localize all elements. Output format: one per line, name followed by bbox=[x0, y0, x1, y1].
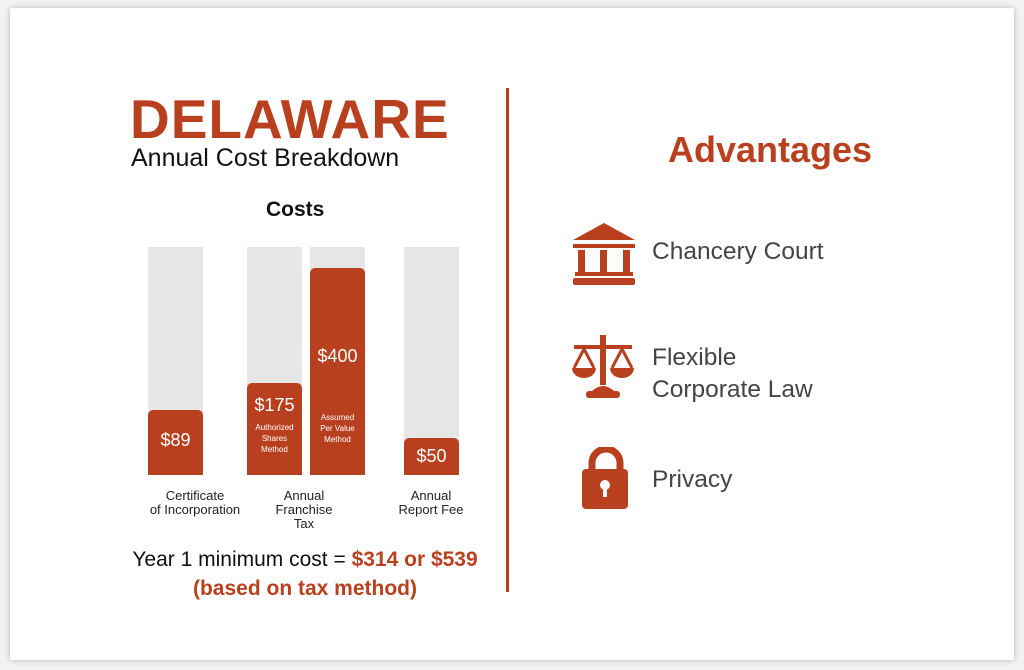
bar: assumed par value: $400 bbox=[317, 346, 358, 366]
text: flexible corporate law: Corporate Law bbox=[652, 376, 813, 403]
bar chart bbox=[148, 247, 464, 531]
bar chart: Franchise bbox=[275, 502, 333, 517]
bar labels: of Incorporation bbox=[150, 502, 240, 517]
bar: authorized shares: Authorized bbox=[255, 423, 294, 432]
bar: certificate: $89 bbox=[160, 430, 191, 450]
bar: assumed par value: Assumed bbox=[321, 413, 354, 422]
total cost text: Year 1 minimum cost = $314 or $539 bbox=[132, 548, 478, 571]
text: chancery court: Chancery Court bbox=[652, 238, 824, 265]
bar labels: Certificate bbox=[166, 488, 224, 503]
bar: annual report bbox=[404, 247, 459, 475]
bar: annual report: $50 bbox=[416, 446, 447, 466]
bar labels bbox=[150, 488, 240, 517]
icon: lock bbox=[582, 447, 628, 509]
bar chart: Report Fee bbox=[398, 502, 464, 517]
text: flexible corporate law bbox=[652, 344, 813, 403]
bar chart: Tax bbox=[294, 516, 314, 531]
icon: scales bbox=[572, 335, 634, 398]
total cost text: (based on tax method) bbox=[193, 577, 417, 600]
advantages heading: Advantages bbox=[668, 129, 872, 170]
bar: authorized shares: Shares bbox=[262, 434, 287, 443]
bar chart: Annual bbox=[284, 488, 324, 503]
bar: assumed par value: Per Value bbox=[320, 424, 355, 433]
subtitle: Annual Cost Breakdown bbox=[131, 144, 399, 172]
text: flexible corporate law: Flexible bbox=[652, 344, 736, 371]
bar: assumed par value: Method bbox=[324, 435, 351, 444]
total cost text bbox=[132, 548, 478, 600]
divider bbox=[506, 88, 509, 592]
title: DELAWARE bbox=[130, 88, 450, 150]
costs heading: Costs bbox=[266, 198, 324, 221]
text: privacy: Privacy bbox=[652, 466, 732, 493]
bar: assumed par value bbox=[310, 247, 365, 475]
bar: certificate bbox=[148, 247, 203, 475]
bar: authorized shares: $175 bbox=[254, 395, 295, 415]
bar chart: Annual bbox=[411, 488, 451, 503]
bar: authorized shares bbox=[247, 247, 302, 475]
bar: authorized shares: Method bbox=[261, 445, 288, 454]
icon: courthouse bbox=[573, 223, 635, 285]
